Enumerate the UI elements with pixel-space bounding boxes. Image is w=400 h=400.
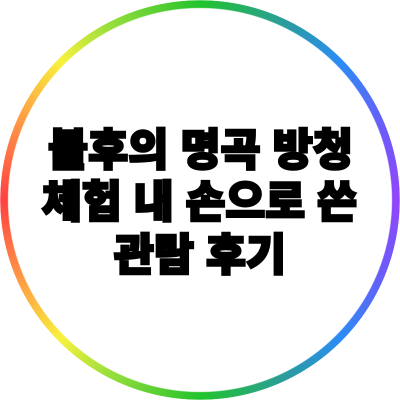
title line 2: 체험 내 손으로 쓴 — [42, 178, 357, 227]
title line 1: 불후의 명곡 방청 — [48, 126, 353, 175]
title line 3: 관람 후기 — [114, 231, 286, 280]
